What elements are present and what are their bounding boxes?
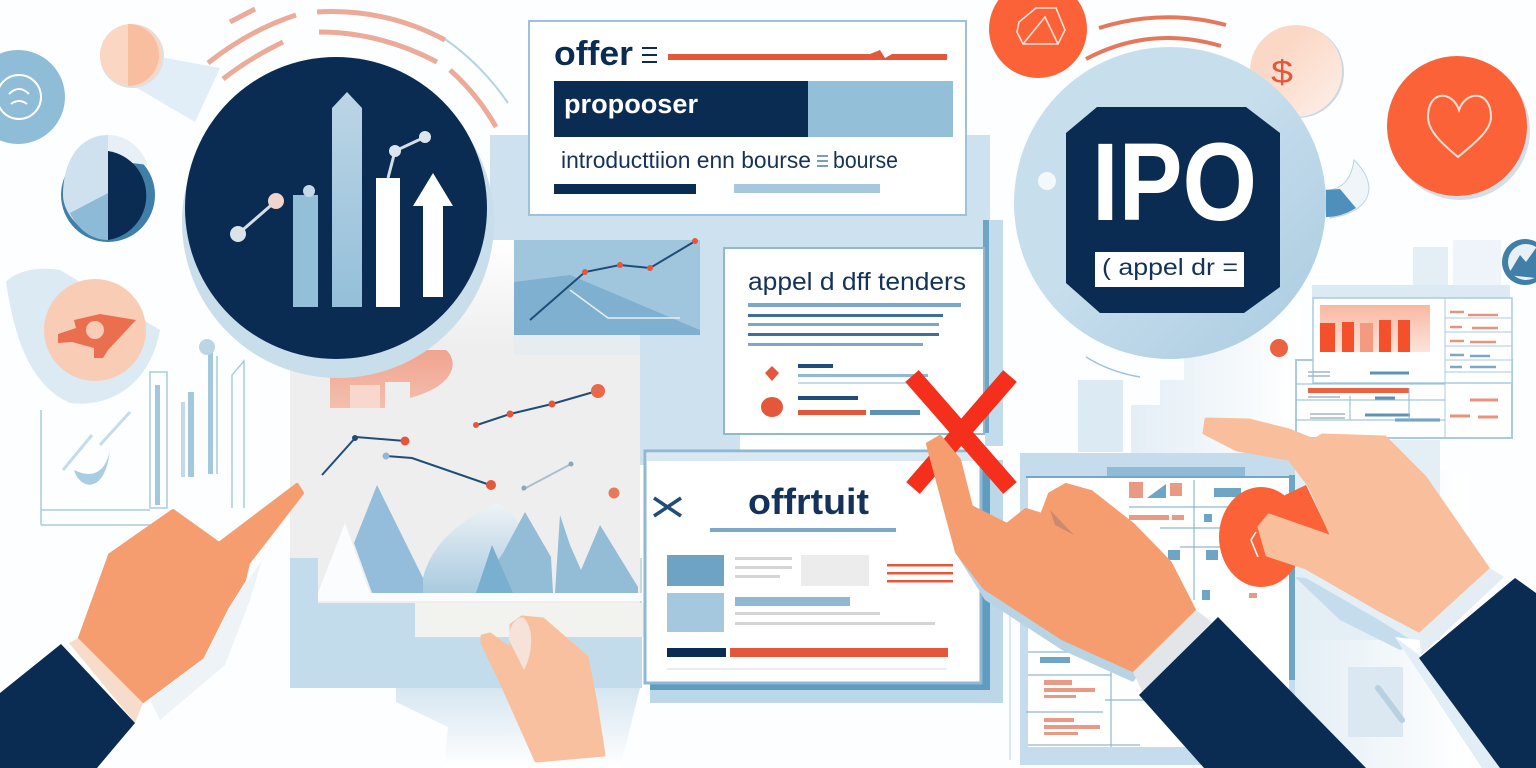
rising bars xyxy=(293,92,453,307)
partial ring behind IPO xyxy=(1326,160,1369,218)
coral circle with arrow xyxy=(1219,485,1330,587)
document: appel tenders xyxy=(724,220,1003,446)
top card: offer proposer: bourse xyxy=(833,147,898,173)
large chart sheet background xyxy=(290,240,644,637)
top card: offer proposer: introducttiion enn bourse xyxy=(561,147,811,173)
hand: lower centre xyxy=(482,617,604,761)
decorative arcs top left xyxy=(208,9,508,127)
line chart card xyxy=(514,238,700,335)
icon: pie chart xyxy=(61,135,155,242)
IPO badge xyxy=(1014,47,1326,359)
mini bar chart xyxy=(1320,305,1430,352)
hand: left pointing xyxy=(0,485,302,768)
icon: heart circle xyxy=(1387,56,1530,200)
chart lines xyxy=(322,384,620,498)
document: offrtuit xyxy=(645,451,1003,703)
main dark chart circle xyxy=(182,57,494,378)
document: offrtuit: offrtuit xyxy=(748,481,869,522)
icon: dollar circle xyxy=(1250,25,1344,118)
IPO badge: IPO xyxy=(1092,121,1257,244)
hand: centre right touching cross xyxy=(928,437,1366,768)
small round icon right edge xyxy=(1502,239,1536,285)
coral arcs top right xyxy=(1086,17,1226,59)
coral dot xyxy=(1270,339,1288,357)
hand: right xyxy=(1204,419,1536,768)
IPO badge: ( appel dr = xyxy=(1102,254,1238,280)
icon: red cross xyxy=(912,376,1010,488)
table panel right xyxy=(1296,298,1512,438)
arc under badge xyxy=(1086,357,1140,377)
peach shape under circle xyxy=(330,350,453,408)
chart on sheet xyxy=(318,384,638,593)
top card: offer proposer xyxy=(529,21,966,215)
top card: offer proposer: offer xyxy=(554,35,633,73)
top right coral icon xyxy=(989,0,1087,78)
icon: peach circle top xyxy=(100,24,220,122)
icon: blue circle left xyxy=(0,50,65,144)
top card: offer proposer: propooser xyxy=(564,89,698,119)
document: appel tenders: appel d dff tenders xyxy=(748,268,966,296)
mountains xyxy=(354,485,423,593)
small bar sketch left xyxy=(41,339,244,525)
icon: dollar circle: $ xyxy=(1271,54,1293,90)
line markers xyxy=(230,131,431,242)
icon: peach badge xyxy=(44,279,146,381)
spreadsheet panel xyxy=(1010,453,1295,765)
